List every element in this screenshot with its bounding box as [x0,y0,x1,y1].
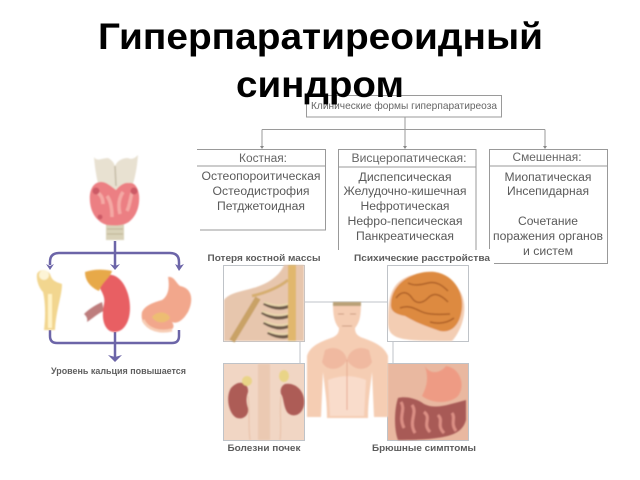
list: visceropathic form types: Нефро-пепсическая [348,216,462,228]
list: visceropathic form types [344,172,466,243]
heading: bone form: Костная: [239,153,287,165]
list: mixed form types: Сочетание [518,216,578,228]
icon: thyroid gland [90,155,139,240]
list: mixed form types: Миопатическая [504,172,592,184]
illustration: symptoms around the body [208,253,491,454]
title: синдром [236,64,404,105]
panel: mixed form [490,150,608,264]
caption: calcium level rises: Уровень кальция повышается [51,366,186,376]
list: mixed form types: поражения органов [493,231,603,243]
list: visceropathic form types: Панкреатическая [356,231,454,243]
illustration: calcium pathway [37,155,191,376]
panel: mental disorders [354,253,491,342]
caption: kidney disease: Болезни почек [228,443,301,454]
figure: male torso [307,302,388,418]
list: bone form types: Остеодистрофия [212,186,310,198]
image: brain [388,266,468,342]
heading: bone mass loss: Потеря костной массы [208,253,320,264]
heading: mental disorders: Психические расстройства [354,253,491,264]
list: visceropathic form types: Нефротическая [360,201,450,213]
list: visceropathic form types: Желудочно-кишечная [344,186,466,198]
list: bone form types [202,171,320,213]
title [98,16,543,105]
box: clinical forms heading: Клинические формы гиперпаратиреоза [311,100,497,112]
icon: femur bone [37,270,62,330]
connector lines [300,302,393,363]
list: visceropathic form types: Диспепсическая [358,172,452,184]
heading: mixed form: Смешенная: [512,152,582,164]
panel: bone form [197,150,326,230]
panel: bone mass loss [208,253,320,342]
connector lines [260,117,547,149]
list: mixed form types: и систем [523,246,573,258]
icon: kidney with adrenal [84,270,130,332]
list: mixed form types [493,172,603,258]
list: bone form types: Петджетоидная [217,201,305,213]
arrows: hormone branching [46,241,184,362]
box: clinical forms heading [306,96,502,117]
icon: stomach [142,277,191,331]
panel: visceropathic form [338,150,476,250]
diagram: clinical forms [197,96,608,264]
caption: abdominal symptoms: Брюшные симптомы [372,443,476,454]
panel: kidney disease [224,364,304,454]
list: bone form types: Остеопороитическая [202,171,320,183]
image: stomach and intestines [388,364,468,440]
image: skeleton shoulder [224,265,304,342]
list: mixed form types: Инсепидарная [507,186,589,198]
title: Гиперпаратиреоидный [98,16,543,57]
image: kidneys [224,364,304,440]
heading: visceropathic form: Висцеропатическая: [352,153,466,165]
panel: abdominal symptoms [372,364,476,454]
